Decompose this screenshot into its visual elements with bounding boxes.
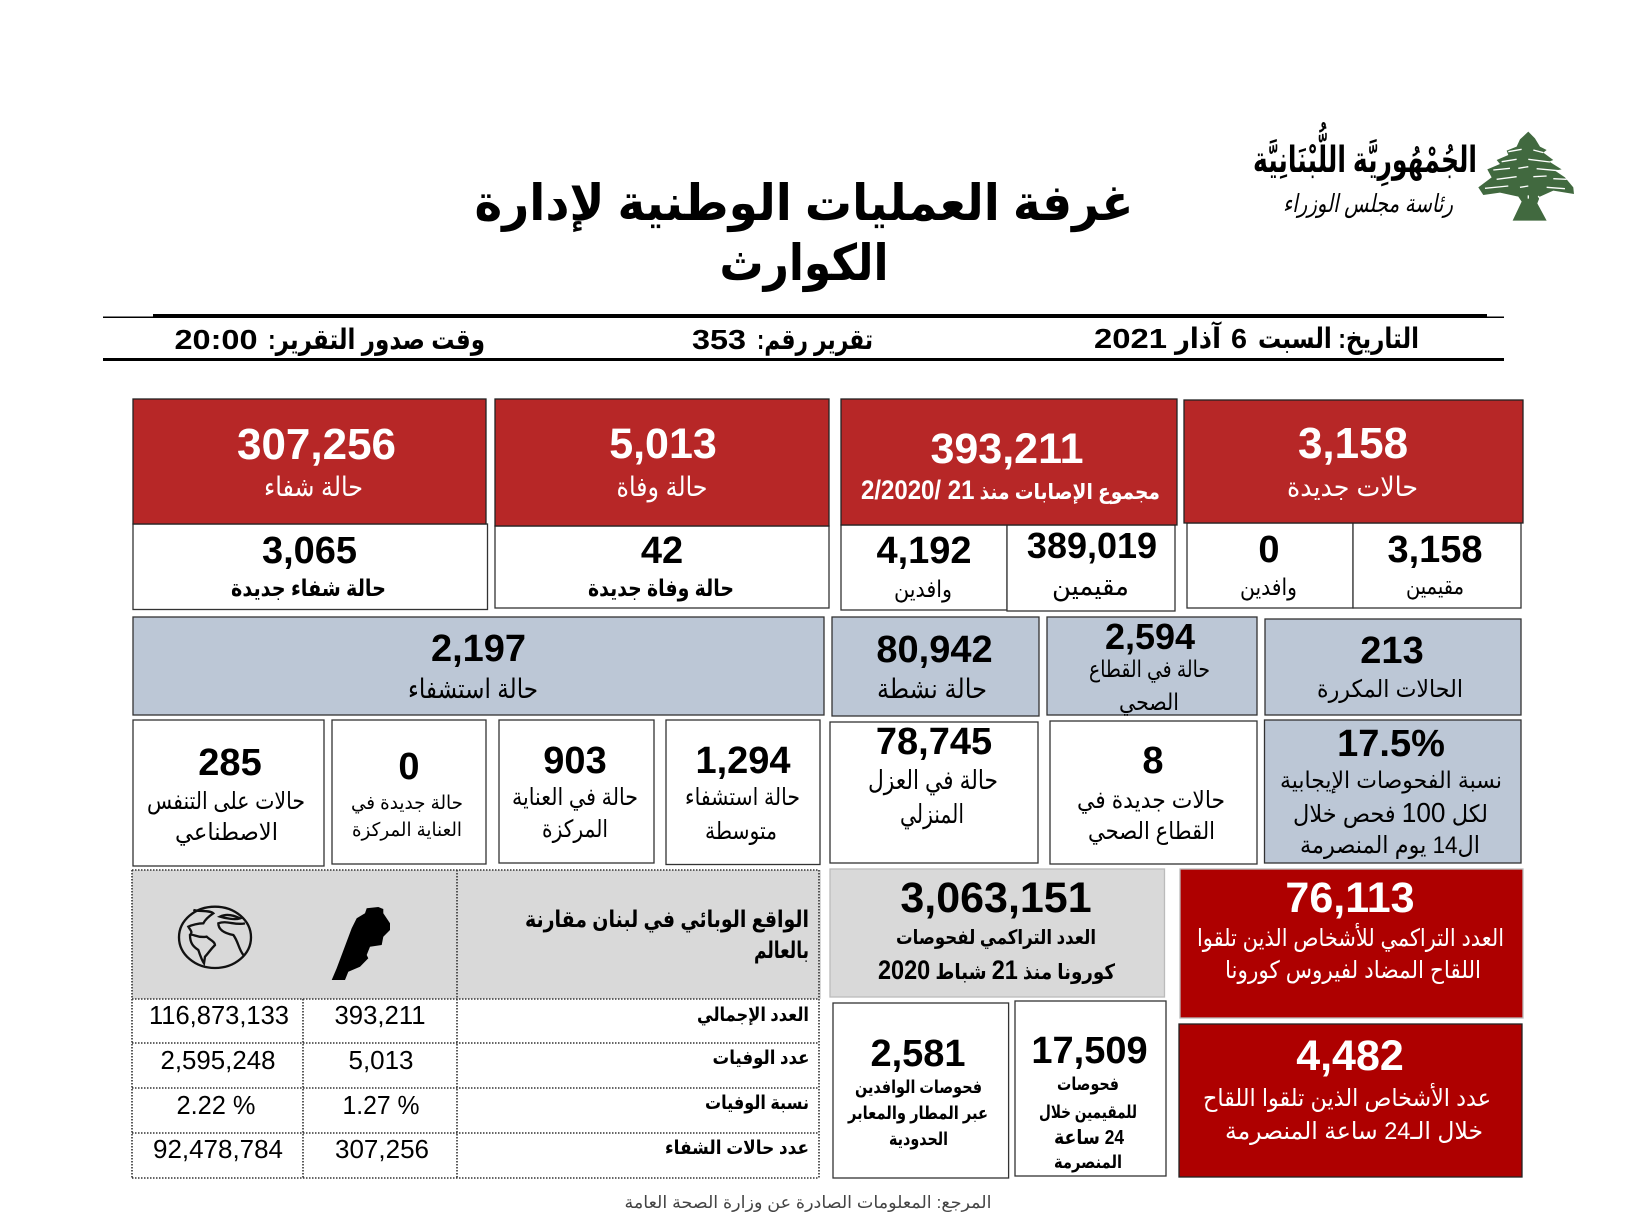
row: deaths: 5,013 <box>348 1045 414 1075</box>
row: recoveries: عدد حالات الشفاء <box>665 1138 809 1159</box>
panel: total infections: مقيمين <box>1052 571 1129 602</box>
panel: home isolation: حالة في العزل <box>868 765 998 796</box>
panel: ventilator cases: 285 <box>198 742 262 784</box>
panel: residents tests: المنصرمة <box>1054 1152 1122 1173</box>
panel: arrivals tests: 2,581 <box>870 1033 966 1075</box>
panel: hospitalised: 2,197 <box>431 628 526 670</box>
logo calligraphy line 1: الجُمْهُورِيَّة اللُّبْنَانِيَّة <box>1253 121 1477 187</box>
panel: total infections: وافدين <box>894 576 952 603</box>
source footnote: المرجع: المعلومات الصادرة عن وزارة الصحة العامة <box>624 1193 992 1213</box>
panel: vaccinated last 24 hours <box>1179 1024 1522 1177</box>
report date: 2021 <box>1094 323 1167 354</box>
panel: new ICU cases: حالة جديدة في <box>351 793 463 814</box>
arrivals: 4,192 <box>876 530 972 572</box>
panel: recoveries: حالة شفاء جديدة <box>231 575 386 601</box>
panel: arrivals tests: فحوصات الوافدين <box>855 1077 982 1098</box>
report number <box>692 324 873 356</box>
panel: vaccinated last 24 hours: خلال الـ24 ساعة المنصرمة <box>1225 1118 1483 1145</box>
panel: Lebanon versus world table: بالعالم <box>754 937 809 963</box>
panel: new ICU cases: العناية المركزة <box>352 820 462 841</box>
panel: active cases: 80,942 <box>876 629 993 671</box>
panel: new health sector cases: 8 <box>1142 740 1164 782</box>
panel: total infections: مجموع الإصابات منذ 21 /2/2020 <box>861 475 1160 505</box>
panel: ventilator cases: الاصطناعي <box>175 819 278 846</box>
new cases value: 3,158 <box>1298 419 1408 468</box>
panel: Lebanon versus world table <box>132 870 821 1178</box>
icon: Lebanon map <box>332 907 390 980</box>
panel: positivity rate <box>1264 720 1521 863</box>
row: death rate: نسبة الوفيات <box>705 1093 809 1114</box>
panel: new health sector cases: القطاع الصحي <box>1088 818 1215 845</box>
panel: moderate hospital cases: 1,294 <box>695 740 791 782</box>
report date: آذار <box>1173 321 1222 355</box>
panel: health sector cases: حالة في القطاع <box>1089 656 1210 683</box>
panel: new cases: وافدين <box>1240 574 1297 601</box>
report number: تقرير رقم: <box>757 324 873 356</box>
panel: new cases: حالات جديدة <box>1287 472 1418 502</box>
panel: new ICU cases <box>332 720 486 864</box>
panel: active cases <box>832 617 1039 716</box>
row: recoveries: 92,478,784 <box>153 1134 283 1164</box>
panel: cumulative PCR tests: 3,063,151 <box>900 874 1092 922</box>
panel: ICU cases <box>499 720 654 863</box>
panel: positivity rate: 17.5% <box>1337 723 1445 765</box>
panel: positivity rate: نسبة الفحوصات الإيجابية <box>1280 767 1502 794</box>
panel: residents tests <box>1015 1001 1166 1176</box>
panel: new ICU cases: 0 <box>398 746 420 788</box>
panel: deaths: حالة وفاة جديدة <box>588 575 734 602</box>
row: total cases <box>149 1000 809 1030</box>
panel: deaths: حالة وفاة <box>616 472 708 503</box>
total infections value: 393,211 <box>930 425 1084 473</box>
panel: arrivals tests <box>833 1003 1009 1178</box>
panel: ICU cases: 903 <box>543 740 607 782</box>
panel: deaths <box>495 399 829 608</box>
panel: arrivals tests: الحدودية <box>889 1129 948 1150</box>
row: total cases: العدد الإجمالي <box>697 1005 809 1026</box>
panel: new cases <box>1184 400 1523 608</box>
panel: hospitalised: حالة استشفاء <box>408 674 538 704</box>
panel: home isolation: 78,745 <box>876 721 992 763</box>
panel: home isolation: المنزلي <box>900 799 964 830</box>
panel: residents tests: 24 ساعة <box>1054 1127 1125 1149</box>
residents: 389,019 <box>1027 525 1157 566</box>
report time: 20:00 <box>174 324 258 355</box>
panel: health sector cases: الصحي <box>1119 689 1179 716</box>
report date <box>1094 321 1419 355</box>
panel: vaccinated last 24 hours: 4,482 <box>1296 1032 1404 1080</box>
icon: globe <box>179 907 251 968</box>
row: deaths: عدد الوفيات <box>712 1048 810 1069</box>
panel: home isolation <box>830 721 1038 863</box>
row: total cases: 116,873,133 <box>149 1000 289 1030</box>
panel: residents tests: فحوصات <box>1057 1074 1119 1095</box>
panel: cumulative vaccinated: 76,113 <box>1285 874 1415 922</box>
panel: duplicate cases <box>1265 619 1521 715</box>
panel: duplicate cases: 213 <box>1360 630 1424 672</box>
panel: new health sector cases <box>1050 721 1257 864</box>
panel: cumulative PCR tests: العدد التراكمي لفحوصات <box>896 927 1096 950</box>
panel: hospitalised <box>133 617 824 715</box>
row: total cases: 393,211 <box>334 1000 426 1030</box>
new recoveries: 3,065 <box>262 530 357 572</box>
title <box>474 175 1134 293</box>
panel: new cases: مقيمين <box>1406 573 1464 600</box>
row: death rate <box>176 1090 809 1120</box>
table heading: الواقع الوبائي في لبنان مقارنة <box>525 906 809 933</box>
panel: health sector cases <box>1047 616 1257 716</box>
panel: moderate hospital cases <box>666 720 820 864</box>
panel: vaccinated last 24 hours: عدد الأشخاص الذين تلقوا اللقاح <box>1203 1083 1491 1112</box>
logo calligraphy line 2: رئاسة مجلس الوزراء <box>1283 190 1453 219</box>
total deaths: 5,013 <box>609 420 717 468</box>
panel: cumulative PCR tests <box>830 869 1164 997</box>
panel: positivity rate: لكل 100 فحص خلال <box>1293 797 1488 828</box>
panel: moderate hospital cases: متوسطة <box>705 818 777 845</box>
panel: moderate hospital cases: حالة استشفاء <box>685 784 800 811</box>
panel: ventilator cases: حالات على التنفس <box>147 788 305 815</box>
row: deaths <box>160 1045 810 1075</box>
title: غرفة العمليات الوطنية لإدارة <box>474 175 1134 233</box>
panel: ICU cases: حالة في العناية <box>512 784 638 811</box>
row: recoveries <box>153 1134 809 1164</box>
panel: positivity rate: ال14 يوم المنصرمة <box>1300 832 1480 859</box>
panel: cumulative vaccinated: العدد التراكمي للأشخاص الذين تلقوا <box>1197 923 1504 952</box>
report time: وقت صدور التقرير: <box>268 324 485 356</box>
new residents: 3,158 <box>1387 529 1483 571</box>
panel: residents tests: للمقيمين خلال <box>1039 1102 1137 1123</box>
row: deaths: 2,595,248 <box>160 1045 276 1075</box>
panel: new health sector cases: حالات جديدة في <box>1077 787 1225 814</box>
total recoveries: 307,256 <box>237 420 396 469</box>
row: death rate: 1.27 % <box>342 1090 420 1120</box>
panel: cumulative vaccinated: اللقاح المضاد لفيروس كورونا <box>1225 957 1481 984</box>
panel: active cases: حالة نشطة <box>877 674 987 704</box>
report date: التاريخ: السبت <box>1258 323 1419 355</box>
row: death rate: 2.22 % <box>176 1090 256 1120</box>
panel: ICU cases: المركزة <box>542 816 608 843</box>
report time <box>174 324 485 356</box>
report number: 353 <box>692 324 746 355</box>
new deaths: 42 <box>641 530 683 572</box>
icon: cedar tree <box>1478 132 1574 221</box>
panel: recoveries <box>133 399 488 610</box>
panel: ventilator cases <box>133 720 324 866</box>
panel: recoveries: حالة شفاء <box>264 472 363 502</box>
panel: cumulative PCR tests: كورونا منذ 21 شباط 2020 <box>878 955 1116 985</box>
row: recoveries: 307,256 <box>335 1134 429 1164</box>
panel: total infections <box>841 399 1177 611</box>
panel: arrivals tests: عبر المطار والمعابر <box>847 1103 988 1124</box>
logo: Lebanese Republic presidency of the council of ministers <box>1253 121 1574 221</box>
report date: 6 <box>1231 323 1247 354</box>
panel: residents tests: 17,509 <box>1031 1030 1148 1072</box>
new arrivals: 0 <box>1258 529 1280 571</box>
panel: duplicate cases: الحالات المكررة <box>1317 676 1463 703</box>
report info bar <box>103 314 1504 361</box>
panel: health sector cases: 2,594 <box>1105 616 1195 657</box>
title: الكوارث <box>720 235 888 293</box>
panel: cumulative vaccinated <box>1180 869 1523 1018</box>
